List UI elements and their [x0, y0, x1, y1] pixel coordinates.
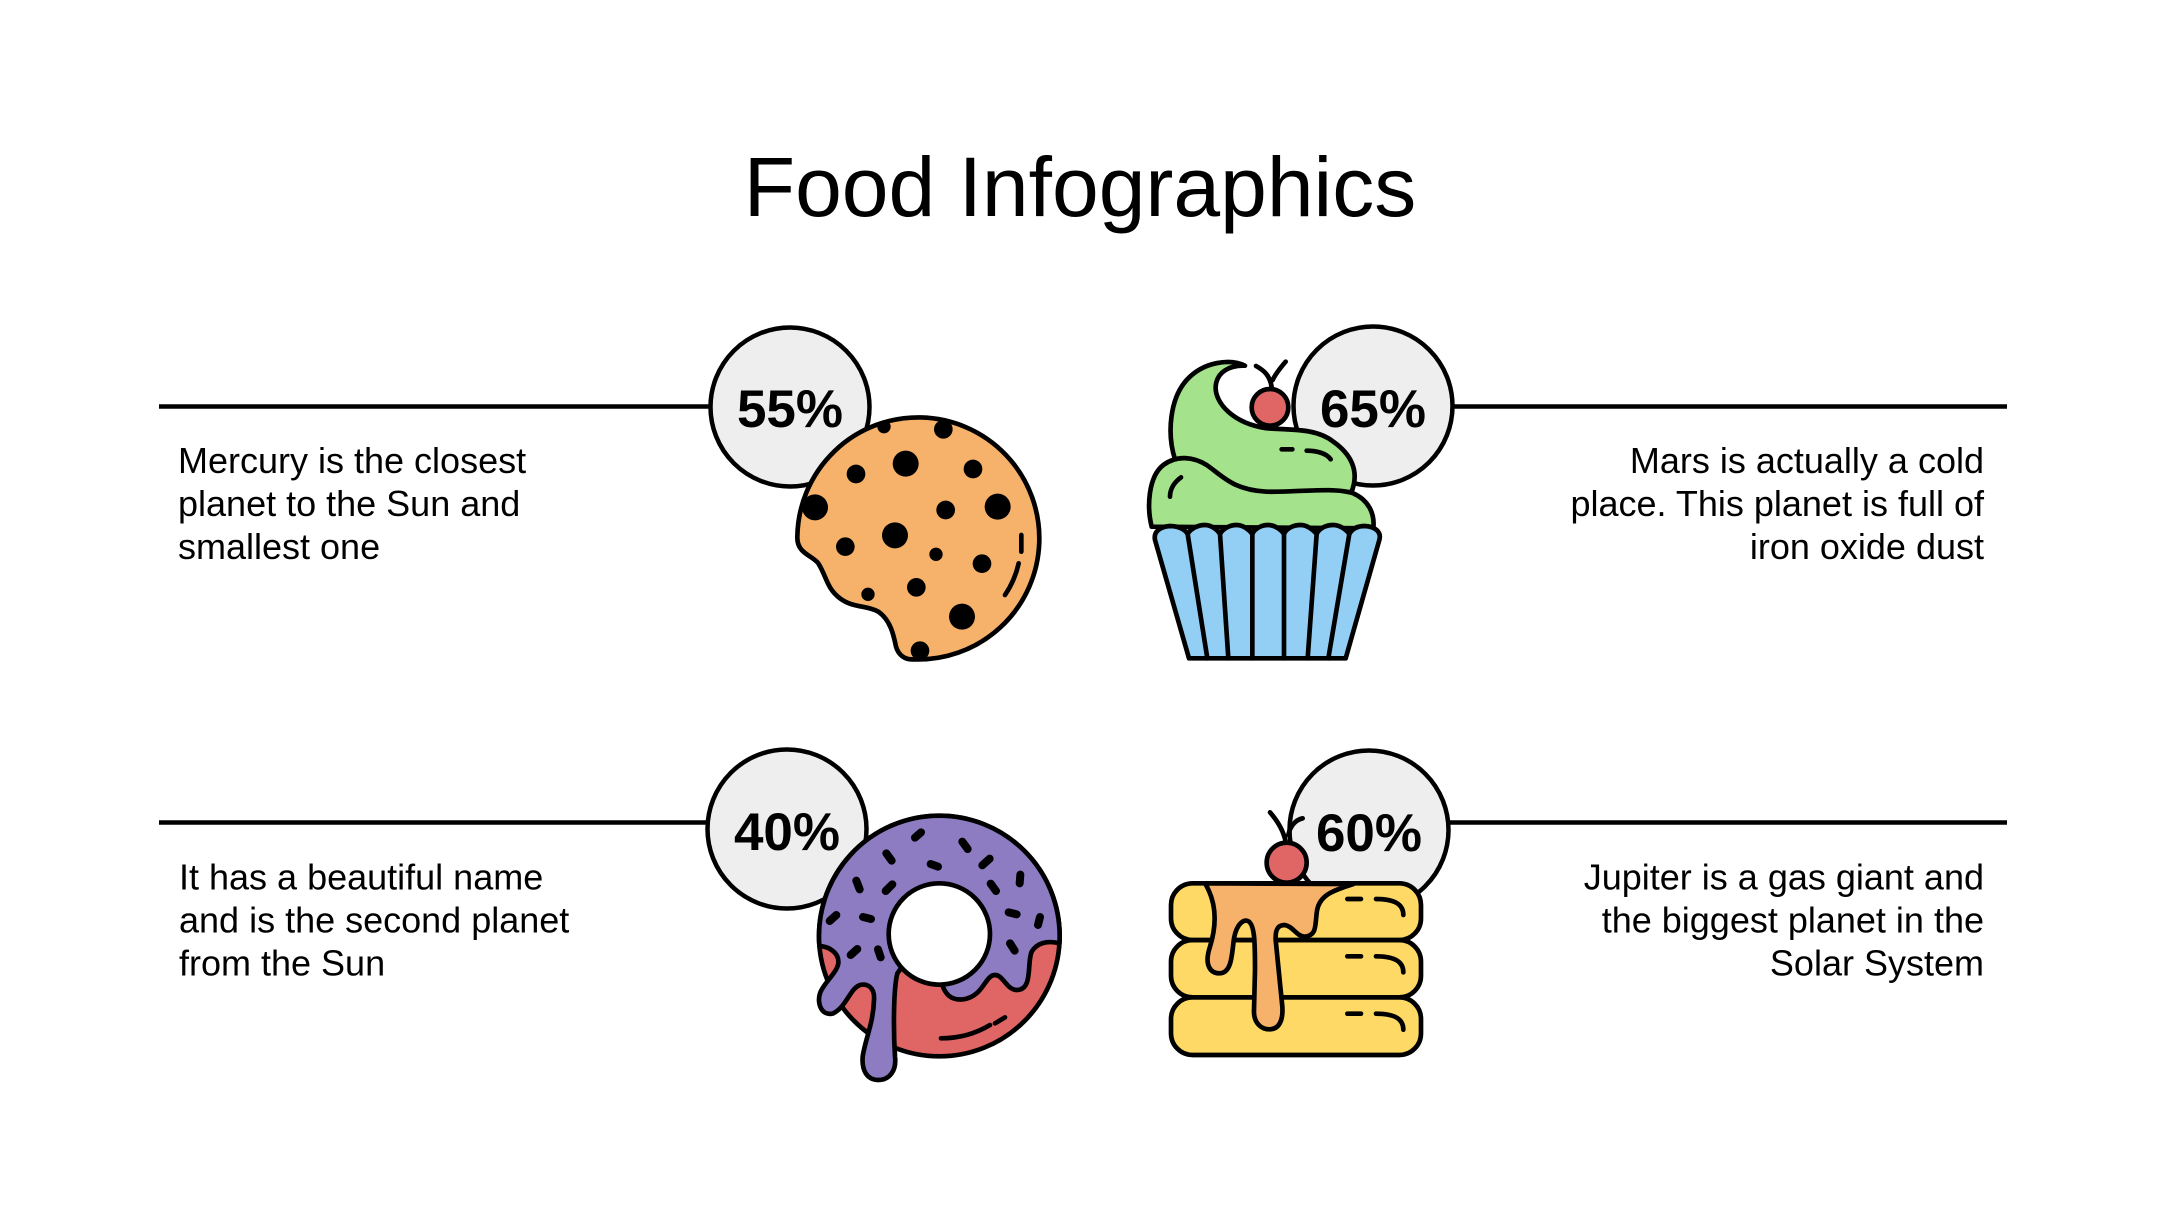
text block: Venus: It has a beautiful name: [179, 856, 543, 898]
infographic canvas: [159, 155, 2007, 1082]
text block: Mars: iron oxide dust: [1750, 526, 1984, 567]
percent badge: 55%: [710, 328, 870, 486]
text block: Venus: from the Sun: [179, 942, 385, 984]
text block: Mercury: Mercury is the closest: [178, 440, 526, 481]
text block: Mercury: smallest one: [178, 526, 380, 567]
text block: Mercury: planet to the Sun and: [178, 483, 520, 524]
percent badge: 65%: 65%: [1320, 380, 1426, 439]
panel: Jupiter / pancakes: [1171, 750, 2007, 1055]
panel: Mars / cupcake: [1149, 326, 2007, 658]
panel: Mercury / cookie: [159, 328, 1039, 660]
connector line: Mercury: [159, 404, 712, 409]
connector line: Jupiter: [1450, 820, 2007, 825]
percent badge: 40%: 40%: [734, 803, 840, 862]
text block: Jupiter: the biggest planet in the: [1602, 900, 1984, 940]
percent badge: 55%: 55%: [737, 380, 843, 439]
text block: Venus: and is the second planet: [179, 900, 569, 940]
percent badge: 60%: 60%: [1316, 804, 1422, 863]
text block: Jupiter: Solar System: [1770, 942, 1984, 984]
icon: donut: [819, 816, 1060, 1080]
icon: cupcake: [1149, 362, 1380, 658]
icon: cookie: [797, 417, 1039, 660]
icon: pancakes: [1171, 812, 1421, 1055]
percent badge: 40%: [708, 750, 866, 908]
percent badge: 60%: [1290, 750, 1448, 910]
text block: Mars: Mars is actually a cold: [1630, 440, 1984, 481]
connector line: Venus: [159, 820, 710, 825]
title: Food Infographics: [744, 140, 1416, 234]
percent badge: 65%: [1294, 326, 1452, 486]
text block: Jupiter: Jupiter is a gas giant and: [1584, 856, 1984, 898]
panel: Venus / donut: [159, 750, 1060, 1080]
connector line: Mars: [1452, 404, 2007, 409]
text block: Mars: place. This planet is full of: [1570, 483, 1985, 524]
